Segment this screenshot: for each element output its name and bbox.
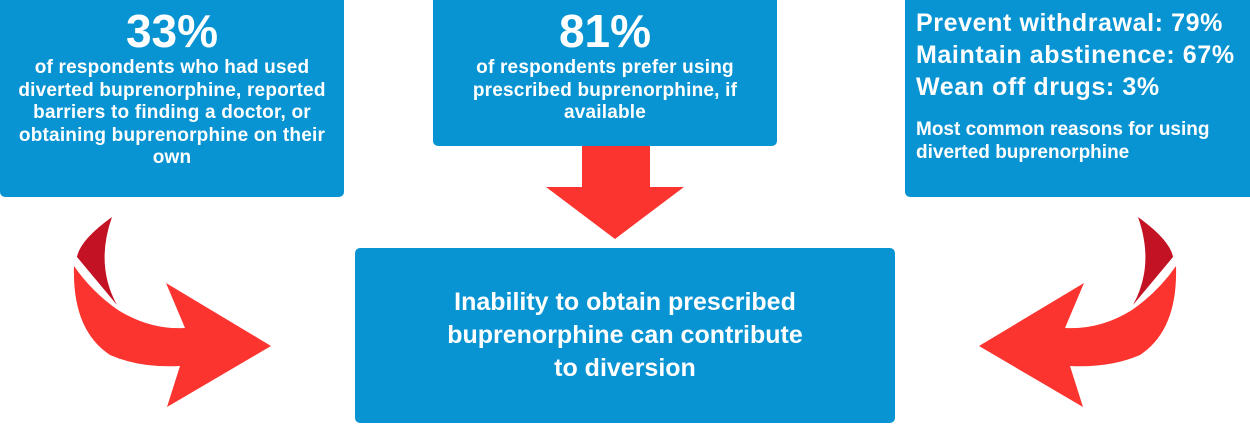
text: reason percentages: Prevent withdrawal: 79% (916, 9, 1223, 37)
text: 81% description: prescribed buprenorphine, if (473, 80, 737, 100)
arrow: left curved (74, 217, 271, 407)
text: reason percentages: Maintain abstinence: 67% (916, 41, 1235, 69)
text: 81% description: of respondents prefer using (476, 57, 734, 78)
text: reason percentages: Wean off drugs: 3% (916, 73, 1160, 101)
heading: 33%: 33% (126, 5, 218, 57)
panel: 81% stat (433, 0, 777, 146)
text: reason percentages (916, 9, 1235, 101)
text: 33% description: barriers to finding a doctor, or (33, 102, 311, 123)
text: reasons caption: diverted buprenorphine (916, 142, 1129, 163)
panel: conclusion (355, 248, 895, 423)
panel: reasons (905, 0, 1250, 197)
heading: 81%: 81% (559, 5, 651, 57)
text: conclusion: Inability to obtain prescribed (454, 288, 796, 316)
text: reasons caption (916, 119, 1209, 163)
text: 33% description (18, 57, 326, 168)
text: reasons caption: Most common reasons for using (916, 119, 1209, 140)
text: 81% description: available (564, 102, 646, 123)
text: conclusion: to diversion (554, 354, 696, 382)
text: conclusion: buprenorphine can contribute (447, 321, 803, 349)
text: 33% description: diverted buprenorphine, reported (18, 80, 326, 100)
arrow: right curved (979, 217, 1176, 407)
text: 33% description: of respondents who had used (35, 57, 309, 78)
text: 33% description: own (153, 147, 191, 168)
arrow: down (546, 146, 684, 239)
text: conclusion (447, 288, 803, 382)
text: 81% description (473, 57, 737, 123)
text: 33% description: obtaining buprenorphine on their (19, 124, 325, 146)
panel: 33% stat (0, 0, 344, 197)
